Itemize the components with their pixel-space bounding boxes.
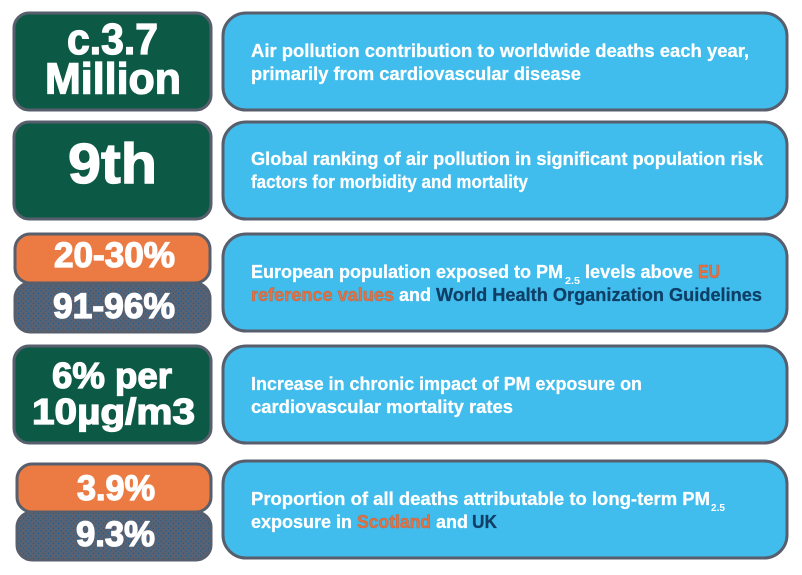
description panel: ranking: Global ranking of air pollution in significant population risk	[251, 149, 764, 169]
description panel: ranking	[223, 122, 787, 219]
description panel: worldwide deaths	[223, 13, 787, 110]
row 1: global deaths	[14, 13, 787, 110]
row 3: European exposure	[15, 234, 787, 332]
description panel: European exposure: and	[399, 285, 431, 305]
stat panel: 91-96%: 91-96%	[53, 287, 175, 326]
description panel: European exposure	[223, 234, 787, 331]
stat panel: 6% per 10µg/m3: 6% per	[52, 355, 172, 396]
stat panel: 6% per 10µg/m3	[14, 346, 211, 443]
stat panel: 91-96%	[15, 283, 210, 332]
description panel: attributable deaths: Scotland	[357, 512, 431, 532]
description panel: European exposure: 2.5	[565, 275, 580, 287]
description panel: attributable deaths: and	[436, 512, 468, 532]
stat panel: 3.9%	[17, 464, 211, 512]
row 2: global ranking	[14, 122, 787, 219]
description panel: European exposure: reference values	[251, 285, 394, 305]
description panel: European exposure: EU	[698, 262, 720, 282]
stat panel: 9th	[14, 122, 211, 219]
description panel: worldwide deaths: primarily from cardiovascular disease	[251, 64, 581, 84]
stat panel: 9th: 9th	[68, 132, 157, 196]
row 5: attributable deaths	[17, 461, 787, 560]
description panel: European exposure: levels above	[585, 262, 693, 282]
stat panel: 9.3%	[17, 512, 211, 560]
row 4: chronic impact	[14, 346, 787, 443]
stat panel: c.3.7 Million: Million	[45, 54, 181, 104]
stat panel: c.3.7 Million	[14, 13, 211, 110]
description panel: chronic impact	[223, 346, 787, 443]
description panel: European exposure: European population exposed to PM	[251, 262, 563, 282]
stat panel: 20-30%	[15, 234, 210, 283]
description panel: chronic impact: Increase in chronic impact of PM exposure on	[251, 374, 642, 394]
description panel: attributable deaths	[223, 461, 787, 558]
stat panel: 20-30%: 20-30%	[54, 236, 175, 275]
stat panel: c.3.7 Million: c.3.7	[67, 15, 158, 64]
description panel: ranking: factors for morbidity and mortality	[251, 172, 528, 192]
description panel: worldwide deaths: Air pollution contribution to worldwide deaths each year,	[251, 41, 749, 61]
stat panel: 6% per 10µg/m3: 10µg/m3	[32, 391, 195, 432]
stat panel: 3.9%: 3.9%	[77, 469, 155, 508]
description panel: chronic impact: cardiovascular mortality rates	[251, 397, 513, 417]
description panel: European exposure: World Health Organization Guidelines	[436, 285, 762, 305]
description panel: attributable deaths: Proportion of all deaths attributable to long-term PM	[251, 489, 710, 509]
stat panel: 9.3%: 9.3%	[76, 515, 155, 554]
description panel: attributable deaths: UK	[472, 512, 497, 532]
description panel: attributable deaths: exposure in	[251, 512, 352, 532]
description panel: attributable deaths: 2.5	[711, 502, 725, 514]
